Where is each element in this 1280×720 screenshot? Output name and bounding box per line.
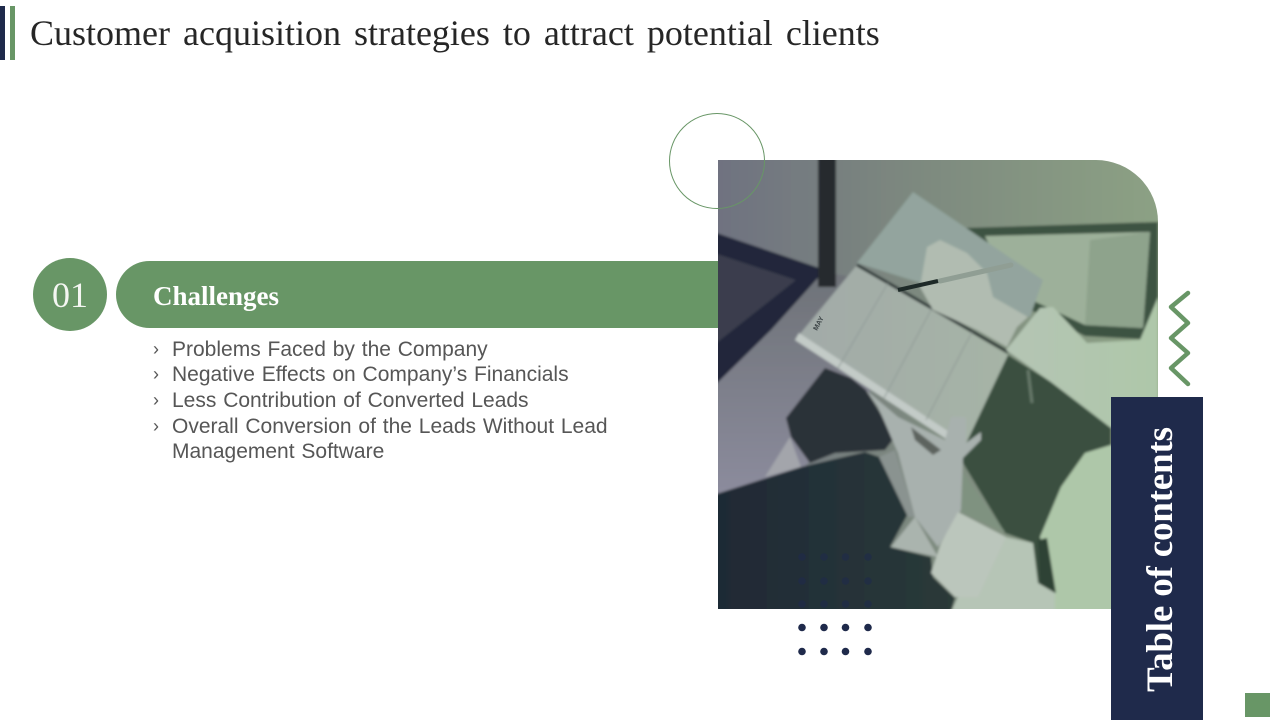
upper sleeve <box>1006 297 1158 428</box>
lower shirt right of strap <box>1038 444 1111 609</box>
upper hand <box>920 240 1028 347</box>
heading pill: Challenges <box>116 261 720 328</box>
bullet list: Negative Effects on Company’s Financials <box>172 363 569 386</box>
table leg <box>818 155 836 287</box>
bullet list: › <box>153 390 159 410</box>
bullet list: › <box>153 416 159 436</box>
dark green trousers <box>955 355 1111 593</box>
cuff <box>931 512 1006 597</box>
pen <box>940 265 1011 281</box>
bullet list: Overall Conversion of the Leads Without Lead <box>172 415 608 438</box>
title: Customer acquisition strategies to attract potential clients <box>30 13 880 53</box>
title accent bars <box>0 6 15 60</box>
bullet list: › <box>153 364 159 384</box>
planner month: MAY <box>813 315 826 332</box>
number badge: 01 <box>33 258 107 331</box>
photo: hands writing in a planner <box>718 160 1158 609</box>
number badge: 01: 01 <box>52 275 88 315</box>
heading pill: Challenges: Challenges <box>153 281 279 311</box>
decorative circle outline <box>669 113 765 209</box>
corner square <box>1245 693 1270 717</box>
vertical heading: Table of contents <box>1140 427 1181 692</box>
upper page <box>857 192 1043 317</box>
lower pages <box>795 265 1008 450</box>
bullet list: › <box>153 339 159 359</box>
side panel: Table of contents <box>1111 397 1203 720</box>
icon: zigzag <box>1168 290 1190 386</box>
bullet list: Problems Faced by the Company <box>172 338 488 361</box>
bullet list: Management Software <box>172 440 384 463</box>
lower dark trousers <box>710 452 955 612</box>
knee <box>786 368 895 463</box>
floor <box>718 275 868 495</box>
lower hand <box>866 390 981 547</box>
shelf <box>718 232 820 384</box>
dot grid <box>798 554 872 656</box>
thigh shading <box>879 450 915 517</box>
bullet list <box>153 338 608 463</box>
laptop <box>965 222 1158 340</box>
lower shirt left of strap <box>951 537 1055 612</box>
bullet list: Less Contribution of Converted Leads <box>172 389 529 412</box>
